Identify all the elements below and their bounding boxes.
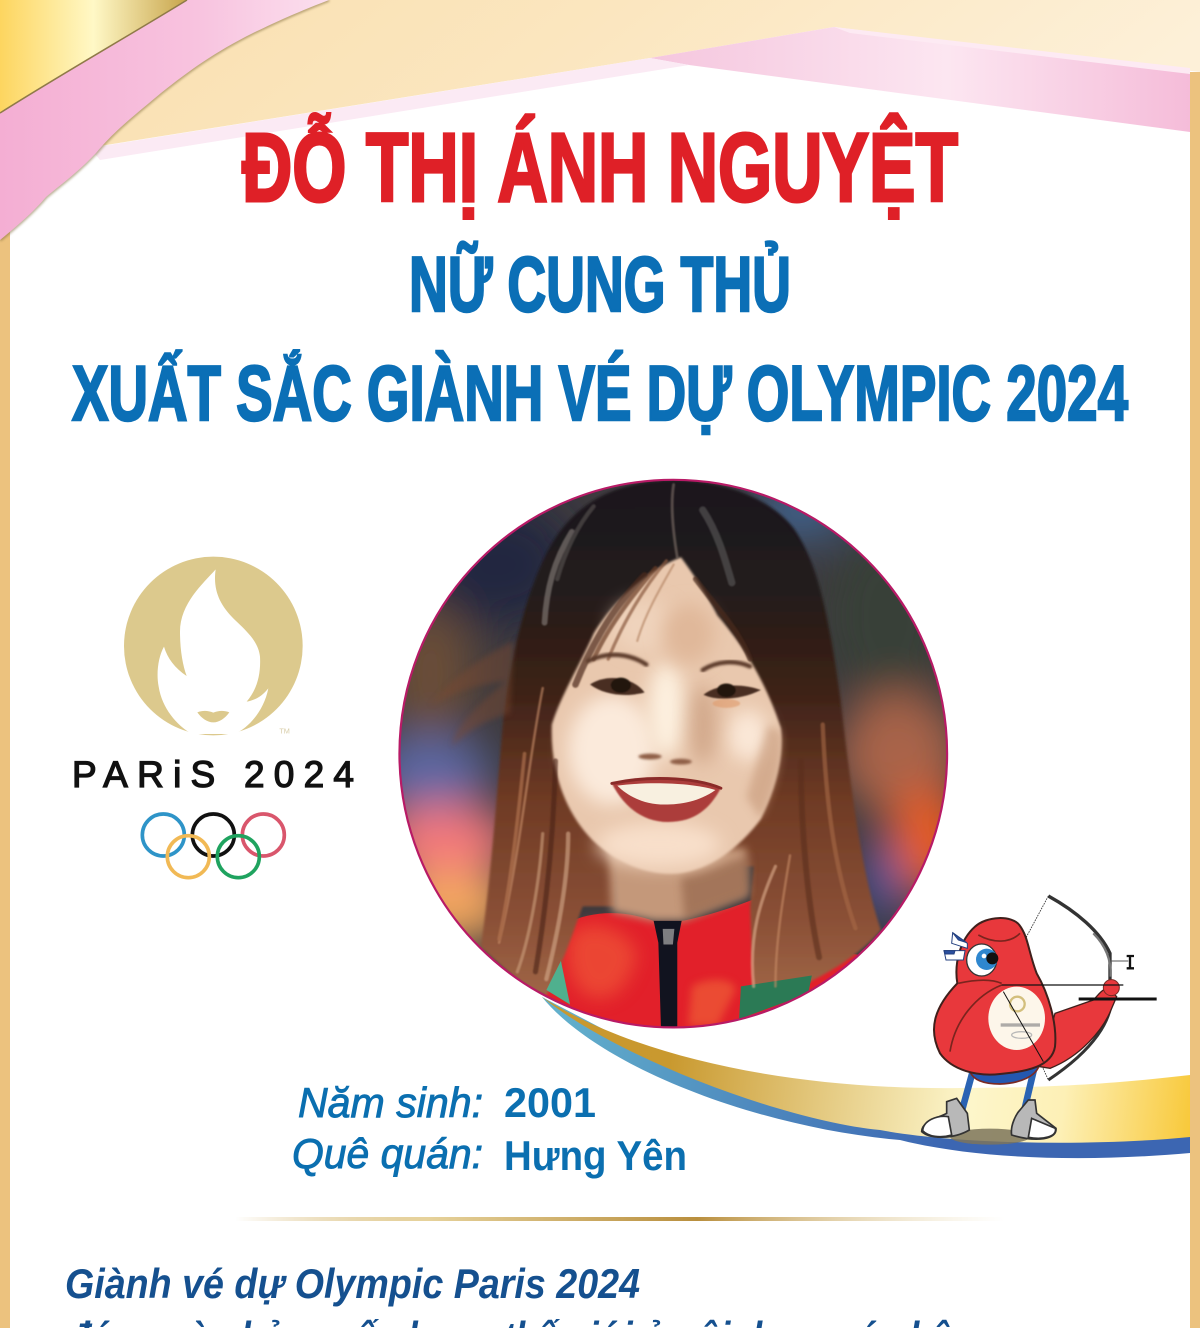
hometown row: Hưng Yên xyxy=(504,1132,687,1179)
eyebrows xyxy=(588,655,646,665)
athlete portrait xyxy=(398,478,948,1028)
fringe strands xyxy=(575,561,750,685)
Paris 2024 logo xyxy=(72,557,354,878)
eyes xyxy=(590,678,761,708)
hair strands xyxy=(499,485,855,986)
eye xyxy=(967,944,998,976)
hometown row: Quê quán: xyxy=(292,1130,483,1177)
golden swoosh xyxy=(542,997,1190,1158)
flame emblem: TM xyxy=(279,726,290,735)
subtitle line 1: NỮ CUNG THỦ xyxy=(409,240,791,328)
flyaway hair xyxy=(448,642,515,745)
PARIS 2024 wordmark: PARiS 2024 xyxy=(72,754,354,795)
portrait ring xyxy=(399,480,947,1027)
chest logo xyxy=(988,987,1045,1050)
body text: Giành vé dự Olympic Paris 2024 xyxy=(65,1260,640,1307)
decorative ribbons xyxy=(0,0,329,240)
shorts xyxy=(970,1063,1040,1084)
right arm xyxy=(1040,989,1117,1068)
smile xyxy=(612,778,721,822)
olympic rings xyxy=(142,814,284,878)
divider xyxy=(235,1217,1005,1221)
face xyxy=(552,557,782,874)
neck xyxy=(608,848,748,921)
zipper xyxy=(654,921,682,1026)
nose xyxy=(638,754,692,765)
bow xyxy=(1003,896,1134,1080)
bowstring and arrow xyxy=(1002,985,1157,1062)
hair mass xyxy=(481,480,881,1005)
right shoe xyxy=(1011,1100,1056,1139)
birth year row: Năm sinh: xyxy=(298,1079,483,1126)
hometown row xyxy=(292,1130,687,1179)
mascot archer xyxy=(922,896,1157,1145)
jacket xyxy=(544,900,858,1026)
flag cap xyxy=(944,933,967,960)
body text xyxy=(65,1260,973,1328)
body xyxy=(934,918,1055,1075)
birth year row: 2001 xyxy=(504,1079,596,1126)
body creases xyxy=(950,933,1020,1052)
legs xyxy=(962,1065,1035,1112)
top banner xyxy=(0,0,1200,190)
ground shadow xyxy=(950,1129,1030,1145)
left shoe xyxy=(922,1098,969,1137)
jacket pattern xyxy=(739,975,812,1019)
face side shade xyxy=(746,725,782,819)
photo contents xyxy=(400,480,946,1026)
birth year row xyxy=(298,1079,596,1126)
flame emblem xyxy=(124,557,303,735)
